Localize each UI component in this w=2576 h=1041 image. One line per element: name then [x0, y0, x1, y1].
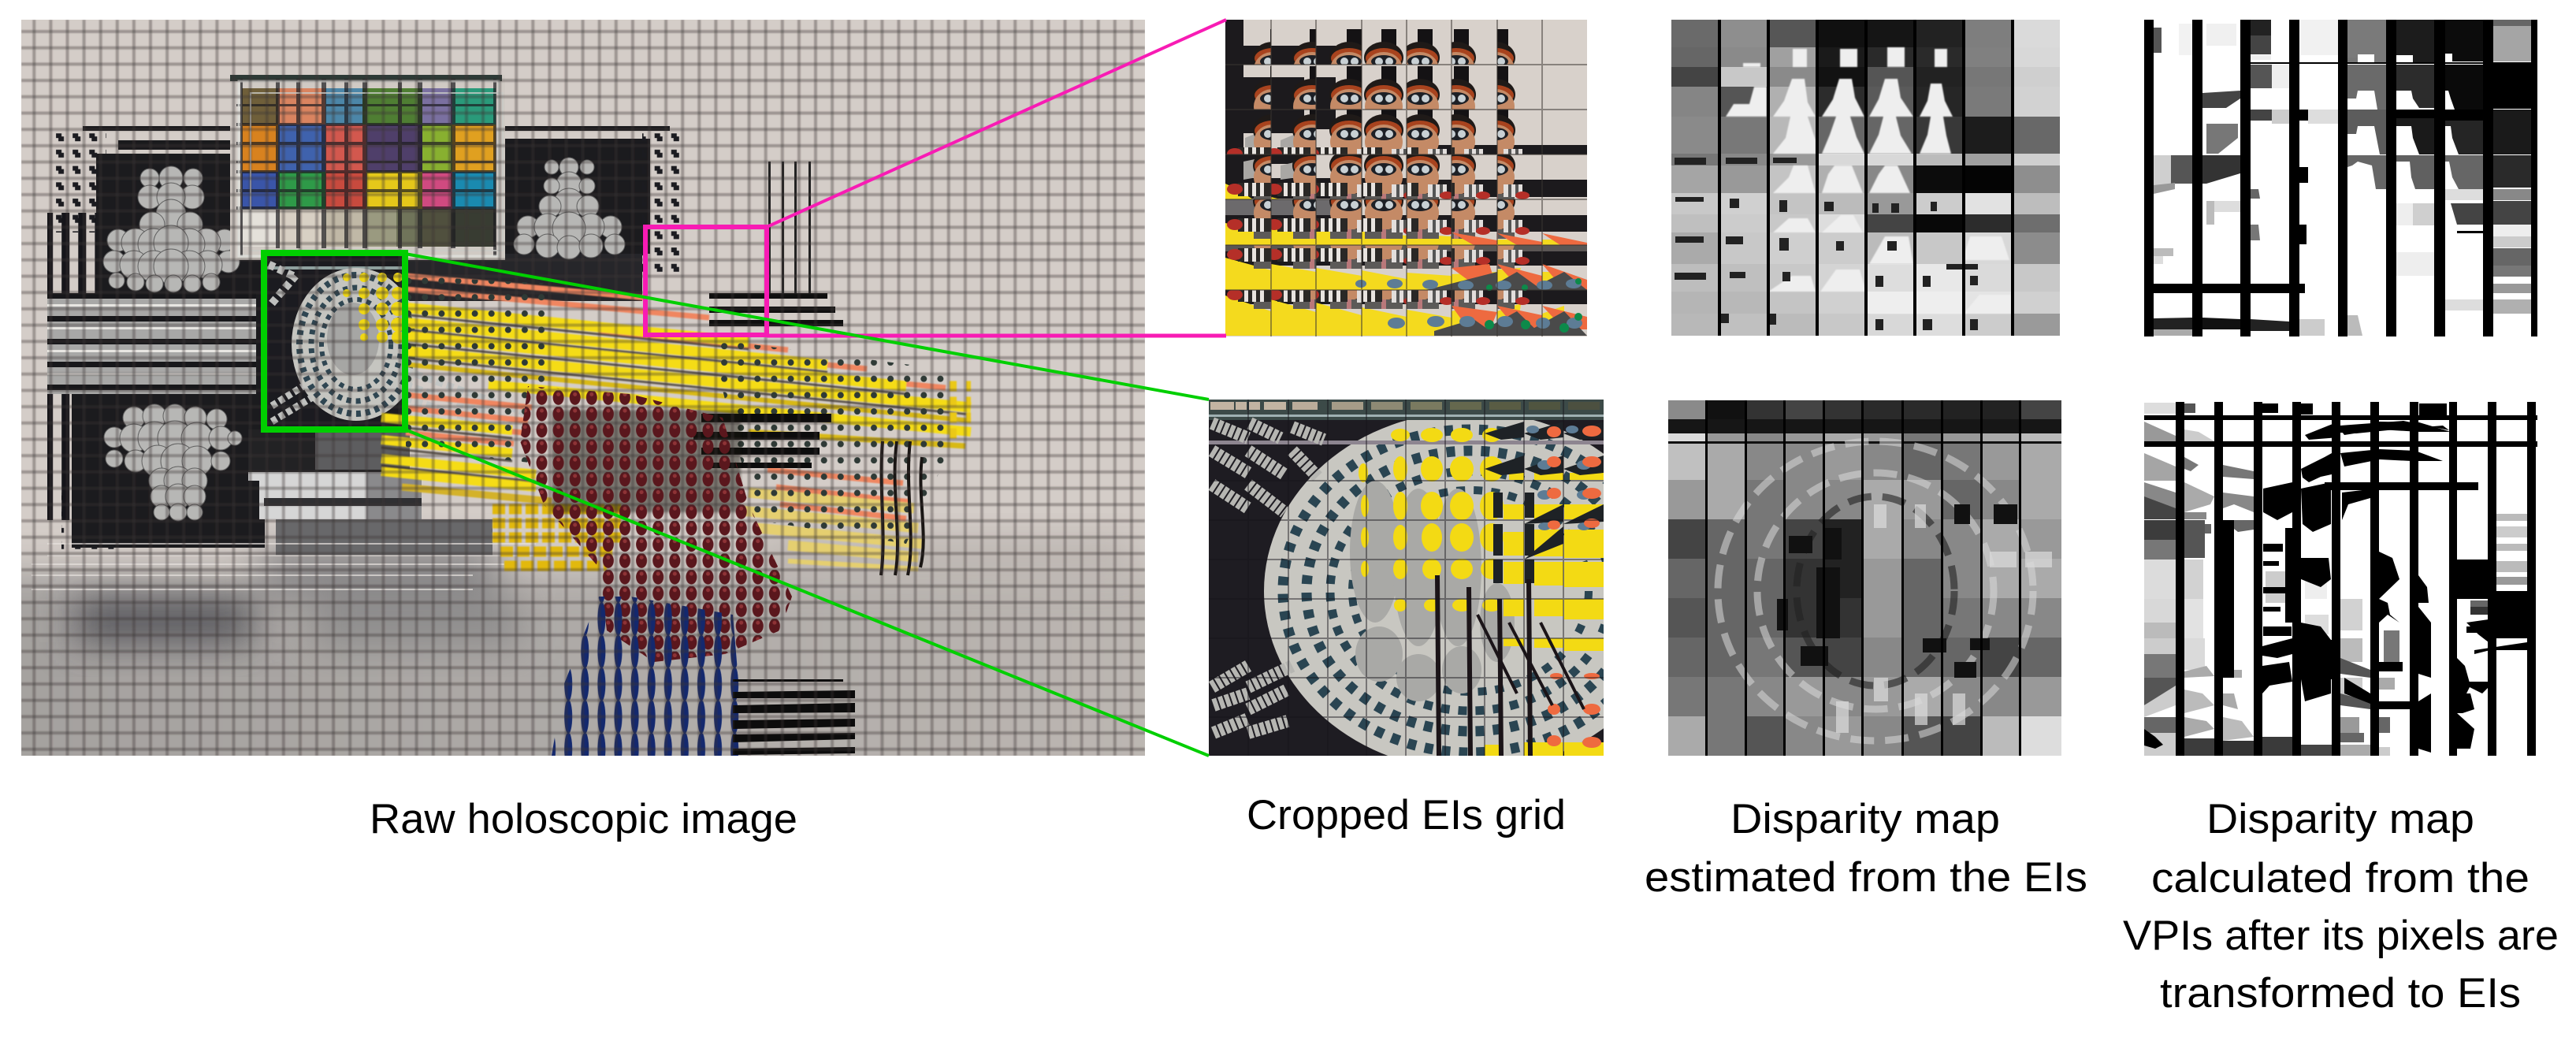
black camera body with dithered edges [32, 126, 843, 589]
caption: disparity map from VPIs [2123, 796, 2559, 1017]
floor shading [21, 530, 1145, 756]
thin black column lines [1705, 400, 2021, 756]
panel: cropped EIs grid, top [1225, 20, 1587, 336]
colour chart [230, 75, 505, 260]
panel: disparity map from VPIs, top [2144, 20, 2537, 336]
black stripes in the centre right [693, 414, 831, 468]
panel: disparity map from VPIs, bottom [2144, 402, 2537, 756]
grey shaded tiles [2144, 403, 2527, 756]
shaded core behind the figure [552, 410, 741, 512]
tile seams [1225, 20, 1587, 336]
light vertical streaks [1836, 504, 2052, 733]
disparity tiles [1671, 20, 2060, 336]
lenslet grid [21, 20, 1145, 756]
caption: raw holoscopic image: Raw holoscopic image [370, 796, 797, 842]
yellow toy teardrops [1359, 428, 1604, 756]
caption: disparity map from EIs: estimated from the EIs [1645, 854, 2087, 901]
panel: disparity map estimated from the EIs, top [1671, 20, 2060, 336]
green zoom box and leader lines [264, 253, 1209, 756]
arcs echoing the wheel [1718, 441, 2033, 741]
dark centre blotches [1777, 504, 2017, 678]
dark specks of the wheels [1675, 158, 1978, 330]
tile seams [1209, 400, 1604, 756]
grey round lens clusters [103, 158, 625, 521]
disparity tiles [1668, 400, 2061, 756]
dark dots on toy wheels [406, 276, 953, 544]
top strip of the crop [1209, 400, 1604, 444]
toy figures in the lens tiles [1227, 29, 1530, 309]
caption: disparity map from VPIs: VPIs after its pixels are [2123, 913, 2559, 959]
bright blobs of the toy faces [1726, 47, 2011, 314]
black column lines [1718, 20, 2014, 336]
blue figure [552, 597, 745, 756]
dark loops right [881, 441, 924, 575]
magenta zoom box and leader lines [645, 20, 1226, 336]
caption: cropped EIs grid: Cropped EIs grid [1247, 792, 1566, 838]
black stripes bottom right [733, 679, 855, 755]
dark background blocks [1225, 20, 1587, 304]
grey hub discs in each tile [1350, 481, 1515, 701]
grey disparity patches [2154, 20, 2531, 336]
column bars [2176, 402, 2536, 756]
yellow and orange toy streaks [381, 276, 971, 569]
beige wedge behind the dark wall [1243, 134, 1294, 180]
caption: disparity map from VPIs: transformed to EIs [2160, 970, 2521, 1017]
chequered stripes at the left [1212, 423, 1324, 733]
wheel with dashed rings [1264, 420, 1604, 756]
black disparity blotches [2144, 403, 2537, 753]
panel: cropped EIs grid, bottom [1209, 400, 1604, 756]
yellow toy body [1225, 184, 1564, 336]
panel: disparity map estimated from the EIs, bottom [1668, 400, 2061, 756]
caption: disparity map from EIs [1645, 796, 2087, 901]
black cables [1437, 575, 1584, 756]
toy wheels and red caps [1485, 422, 1604, 748]
caption: disparity map from EIs: Disparity map [1730, 796, 2000, 842]
maroon figure [520, 386, 792, 662]
caption: disparity map from VPIs: Disparity map [2206, 796, 2474, 842]
caption: disparity map from VPIs: calculated from the [2151, 855, 2530, 902]
orange deck and dark toy bases [1355, 232, 1587, 336]
black streaks near the base [2154, 62, 2531, 293]
ring target inside the green box [264, 254, 528, 435]
panel: raw holoscopic image [21, 20, 1145, 756]
thick black column bars [2144, 20, 2537, 336]
